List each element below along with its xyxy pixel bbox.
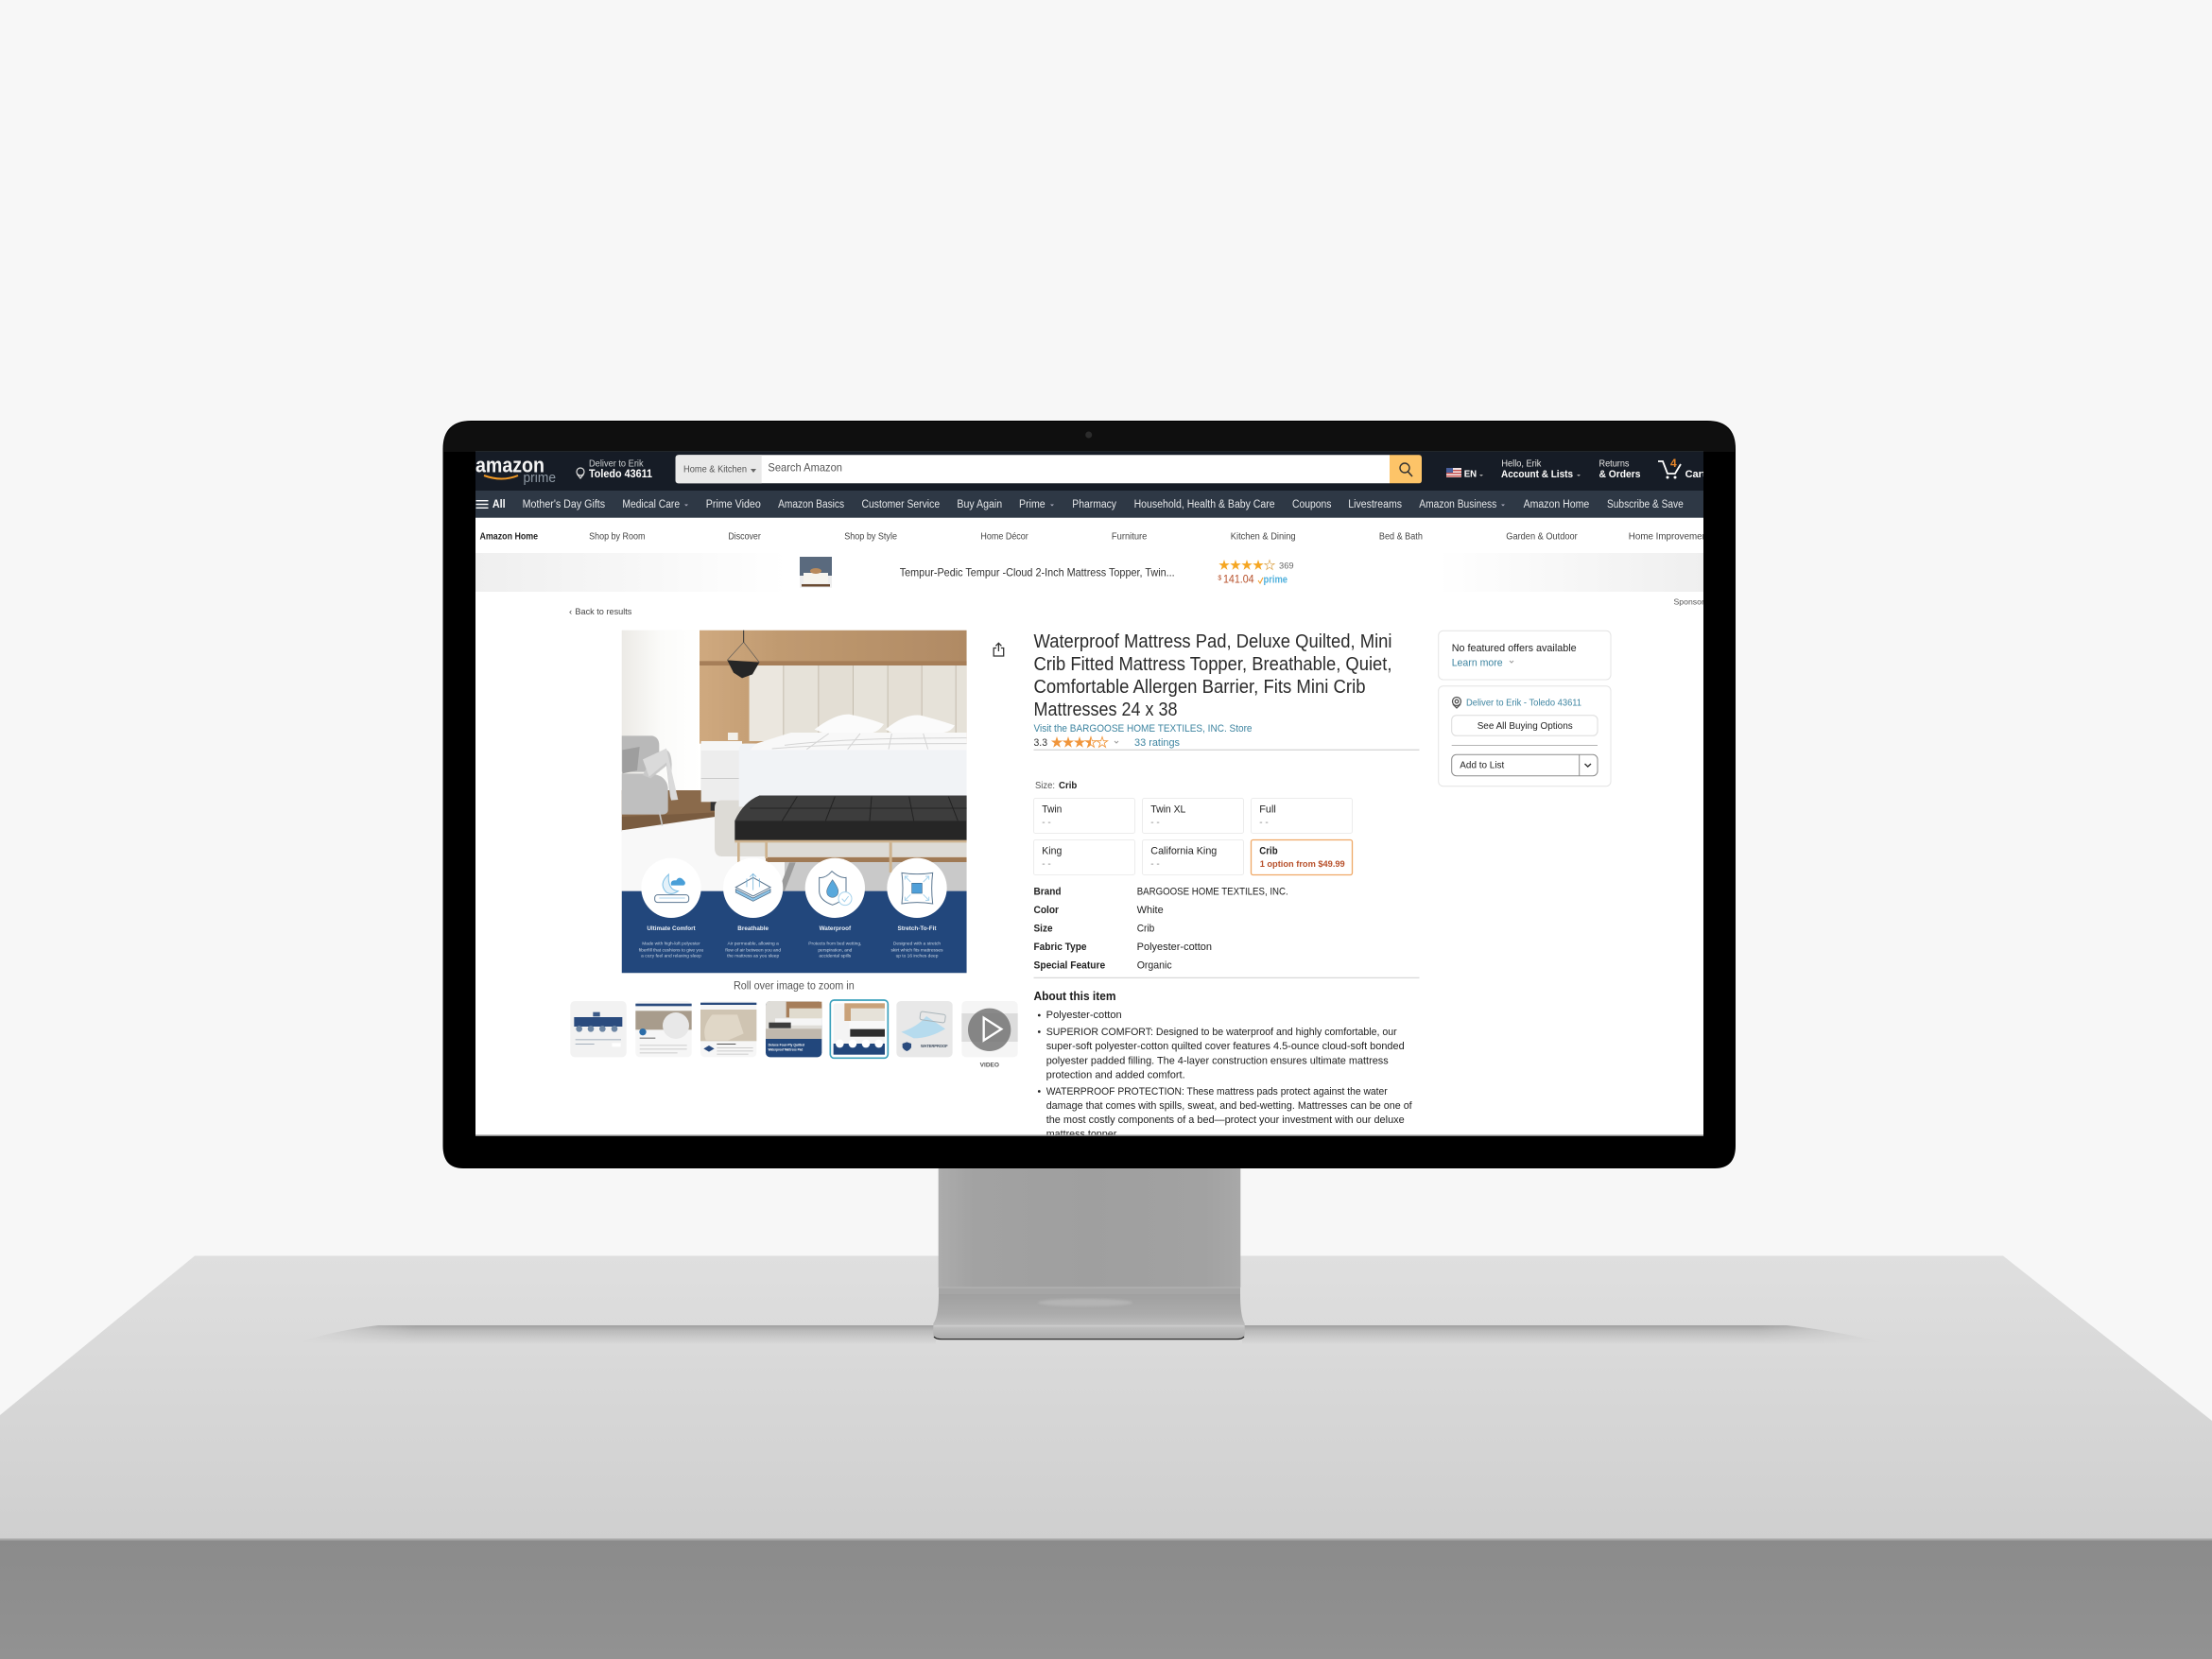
size option: King: - - bbox=[1042, 859, 1051, 870]
back to results link: Back to results bbox=[575, 607, 632, 617]
size selector: Crib bbox=[1059, 780, 1077, 791]
feature: breathable: Air permeable, allowing a bbox=[728, 942, 779, 947]
camera bbox=[1085, 431, 1092, 439]
secondary navigation bar: Customer Service bbox=[862, 499, 940, 510]
size option: California King bbox=[1142, 839, 1244, 875]
thumbnail 6 bbox=[896, 1001, 953, 1057]
secondary navigation bar: Prime bbox=[1019, 499, 1046, 510]
thumbnail 7 video bbox=[961, 1001, 1018, 1069]
sponsored tag: Sponsored bbox=[1673, 596, 1714, 606]
product attributes table: White bbox=[1137, 905, 1164, 916]
sponsored product strip: Tempur-Pedic Tempur -Cloud 2-Inch Mattress Topper, Twin... bbox=[900, 565, 1175, 579]
size selector bbox=[1034, 780, 1352, 875]
secondary navigation bar: Livestreams bbox=[1348, 499, 1402, 510]
language selector bbox=[1446, 468, 1483, 477]
returns and orders: & Orders bbox=[1599, 469, 1641, 480]
monitor bezel bbox=[442, 421, 1736, 1168]
category navigation bbox=[480, 532, 1703, 541]
about this item: polyester padded filling. The 4-layer construction ensures ultimate mattress bbox=[1046, 1055, 1389, 1066]
product title: Crib Fitted Mattress Topper, Breathable, Quiet, bbox=[1034, 654, 1391, 675]
cart: Cart bbox=[1685, 469, 1706, 480]
bench bbox=[734, 796, 967, 873]
search bar: Home & Kitchen bbox=[683, 464, 747, 475]
about this item bbox=[1034, 990, 1413, 1140]
size option: Twin XL: Twin XL bbox=[1150, 804, 1185, 815]
about this item: Polyester-cotton bbox=[1046, 1010, 1122, 1021]
back to results link: ‹ bbox=[569, 607, 575, 617]
size option: Crib selected: Crib bbox=[1259, 845, 1278, 856]
product attributes table: Polyester-cotton bbox=[1137, 942, 1212, 953]
product attributes table: Fabric Type bbox=[1034, 942, 1087, 953]
size selector: Size: bbox=[1035, 780, 1055, 791]
feature: stretch-to-fit: up to 16 inches deep bbox=[896, 954, 939, 959]
size option: Twin: - - bbox=[1042, 818, 1051, 828]
secondary navigation bar bbox=[475, 491, 1703, 518]
thumbnail gallery bbox=[570, 1000, 1018, 1069]
amazon prime logo: prime bbox=[524, 470, 556, 486]
size option: Twin XL: - - bbox=[1150, 818, 1160, 828]
about this item: About this item bbox=[1034, 990, 1115, 1003]
size option: Crib selected: 1 option from $49.99 bbox=[1260, 859, 1345, 870]
about this item: protection and added comfort. bbox=[1046, 1069, 1185, 1080]
category navigation: Kitchen & Dining bbox=[1231, 532, 1296, 543]
product attributes table: Brand bbox=[1034, 887, 1061, 898]
rating row bbox=[1034, 736, 1180, 749]
sponsored product strip bbox=[475, 553, 1703, 592]
product attributes table: Color bbox=[1034, 905, 1060, 916]
secondary navigation bar: Mother's Day Gifts bbox=[523, 499, 605, 510]
size option: California King: California King bbox=[1150, 845, 1217, 856]
secondary navigation bar: Prime Video bbox=[706, 499, 761, 510]
sponsored rating bbox=[1218, 560, 1294, 571]
feature: waterproof: accidental spills bbox=[819, 954, 852, 959]
mattress bbox=[739, 733, 967, 806]
pillows bbox=[815, 715, 955, 733]
category navigation: Garden & Outdoor bbox=[1506, 532, 1578, 543]
product attributes table: Crib bbox=[1137, 923, 1154, 934]
product title bbox=[1034, 631, 1391, 720]
icon: breathable layers bbox=[735, 873, 770, 901]
search button bbox=[1390, 455, 1422, 483]
feature: stretch-to-fit bbox=[887, 858, 947, 959]
top navigation bar bbox=[475, 451, 1706, 491]
feature: stretch-to-fit: skirt which fits mattresses bbox=[890, 947, 943, 953]
about this item: super-soft polyester-cotton quilted cover features 4.5-ounce cloud-soft bonded bbox=[1046, 1041, 1405, 1052]
feature: ultimate comfort: a cozy feel and relaxing sleep bbox=[641, 954, 701, 959]
table bbox=[0, 1255, 2212, 1659]
language selector: EN bbox=[1464, 468, 1477, 479]
feature: waterproof: Waterproof bbox=[820, 925, 852, 932]
feature: ultimate comfort bbox=[639, 873, 703, 959]
offers panel: No featured offers available bbox=[1452, 643, 1577, 654]
product attributes table: Special Feature bbox=[1034, 959, 1105, 971]
buying options panel: Deliver to Erik - Toledo 43611 bbox=[1466, 699, 1581, 709]
blue feature band bbox=[622, 891, 967, 973]
menu icon bbox=[476, 500, 488, 501]
delivery location: Toledo 43611 bbox=[589, 469, 653, 480]
thumbnail 4 bbox=[766, 1001, 821, 1057]
sponsored price: 141.04 bbox=[1223, 573, 1254, 586]
feature: breathable bbox=[723, 858, 783, 959]
search bar: Search Amazon bbox=[768, 461, 842, 475]
thumbnail 5 selected bbox=[830, 1000, 888, 1058]
armchair bbox=[622, 735, 678, 825]
nightstand bbox=[701, 733, 742, 811]
secondary navigation bar: Pharmacy bbox=[1072, 499, 1116, 510]
search bar bbox=[676, 455, 1422, 483]
size option: Twin: Twin bbox=[1042, 804, 1062, 815]
size option: King: King bbox=[1042, 845, 1062, 856]
about this item: damage that comes with spills, sweat, and bed-wetting. Mattresses can be one of bbox=[1046, 1100, 1413, 1112]
feature: ultimate comfort: fiberfill that cushions to give you bbox=[639, 947, 704, 953]
add to list button bbox=[1452, 754, 1598, 776]
offers panel bbox=[1439, 631, 1611, 680]
thumbnail 4: Waterproof Mattress Pad bbox=[769, 1048, 803, 1052]
headboard bbox=[750, 665, 967, 741]
icon: location pin bbox=[1452, 698, 1461, 708]
monitor stand bbox=[933, 1165, 1245, 1339]
monitor shadow on table bbox=[333, 1325, 1843, 1340]
rating row: 3.3 bbox=[1034, 737, 1047, 749]
screen bbox=[475, 451, 1714, 1140]
icon: share bbox=[994, 643, 1004, 656]
size option: Full: - - bbox=[1259, 818, 1269, 828]
category navigation: Discover bbox=[728, 532, 761, 543]
feature: breathable: Breathable bbox=[737, 925, 769, 932]
about this item: the most costly components of a bed—protect your investment with our deluxe bbox=[1046, 1115, 1405, 1126]
size option: California King: - - bbox=[1150, 859, 1160, 870]
sponsored price: prime bbox=[1263, 575, 1287, 586]
category navigation: Amazon Home bbox=[480, 532, 539, 543]
cart bbox=[1658, 459, 1703, 478]
category navigation: Shop by Room bbox=[589, 532, 645, 543]
main product image bbox=[622, 631, 967, 973]
secondary navigation bar: Medical Care bbox=[622, 499, 680, 510]
sponsored thumbnail bbox=[800, 557, 832, 588]
product title: Mattresses 24 x 38 bbox=[1034, 700, 1178, 720]
secondary navigation bar: Household, Health & Baby Care bbox=[1134, 499, 1275, 510]
account menu bbox=[1501, 459, 1581, 477]
bed base bbox=[715, 801, 967, 862]
rating row: 33 ratings bbox=[1134, 737, 1180, 749]
account menu: Hello, Erik bbox=[1501, 458, 1542, 469]
secondary navigation bar: Amazon Home bbox=[1524, 499, 1589, 510]
about this item: WATERPROOF PROTECTION: These mattress pads protect against the water bbox=[1046, 1086, 1388, 1097]
feature: waterproof bbox=[805, 858, 865, 959]
pendant lamp bbox=[727, 631, 759, 678]
zoom hint: Roll over image to zoom in bbox=[734, 981, 855, 993]
secondary navigation bar: Subscribe & Save bbox=[1607, 499, 1684, 510]
feature: waterproof: perspiration, and bbox=[818, 947, 853, 953]
size option: Crib selected bbox=[1252, 839, 1352, 875]
delivery location bbox=[577, 458, 653, 480]
amazon prime logo bbox=[476, 461, 556, 485]
thumbnail 4: Deluxe Four-Ply Quilted bbox=[769, 1044, 804, 1047]
category navigation: Home Improvement bbox=[1629, 532, 1710, 543]
amazon prime logo: amazon bbox=[475, 454, 544, 476]
category navigation: Bed & Bath bbox=[1379, 532, 1423, 543]
size option: Full: Full bbox=[1259, 804, 1276, 815]
size option: Twin XL bbox=[1142, 798, 1244, 834]
category navigation: Home Décor bbox=[980, 532, 1028, 543]
thumbnail 2 bbox=[635, 1001, 692, 1057]
icon: shield and drop bbox=[820, 872, 852, 906]
feature: waterproof: Protects from bed wetting, bbox=[808, 942, 861, 947]
product attributes table: Organic bbox=[1137, 959, 1172, 971]
product attributes table bbox=[1034, 887, 1288, 971]
sponsored price bbox=[1218, 575, 1287, 585]
store link: Visit the BARGOOSE HOME TEXTILES, INC. Store bbox=[1034, 723, 1252, 734]
product title: Comfortable Allergen Barrier, Fits Mini Crib bbox=[1034, 677, 1365, 698]
feature: breathable: flow of air between you and bbox=[725, 947, 781, 953]
see all buying options button: See All Buying Options bbox=[1478, 721, 1573, 732]
size option: Twin bbox=[1034, 798, 1134, 834]
cart: 4 bbox=[1670, 457, 1677, 470]
see all buying options button bbox=[1452, 716, 1598, 735]
icon: moon and cloud bbox=[655, 874, 689, 903]
buying options panel bbox=[1439, 686, 1611, 786]
secondary navigation bar: Coupons bbox=[1292, 499, 1332, 510]
category navigation: Shop by Style bbox=[844, 532, 898, 543]
product attributes table: Size bbox=[1034, 923, 1053, 934]
product attributes table: BARGOOSE HOME TEXTILES, INC. bbox=[1137, 887, 1288, 898]
account menu: Account & Lists bbox=[1501, 469, 1573, 480]
feature: stretch-to-fit: Stretch-To-Fit bbox=[897, 925, 937, 932]
secondary navigation bar: Amazon Basics bbox=[778, 499, 844, 510]
size option: Full bbox=[1252, 798, 1352, 834]
feature: stretch-to-fit: Designed with a stretch bbox=[893, 942, 941, 947]
delivery location: Deliver to Erik bbox=[589, 458, 645, 469]
thumbnail 6: WATERPROOF bbox=[921, 1044, 948, 1048]
icon: stretch square bbox=[902, 873, 933, 904]
add to list button: Add to List bbox=[1460, 760, 1504, 771]
secondary navigation bar: Amazon Business bbox=[1419, 499, 1497, 510]
category navigation: Furniture bbox=[1112, 532, 1148, 543]
size option: King bbox=[1034, 839, 1134, 875]
thumbnail 1 bbox=[570, 1001, 627, 1057]
secondary navigation bar: All bbox=[493, 499, 506, 510]
returns and orders bbox=[1599, 459, 1641, 477]
offers panel: Learn more bbox=[1452, 657, 1503, 668]
about this item: SUPERIOR COMFORT: Designed to be waterproof and highly comfortable, our bbox=[1046, 1027, 1397, 1038]
sponsored price: $ bbox=[1218, 575, 1221, 581]
feature: breathable: the mattress as you sleep bbox=[727, 954, 779, 959]
thumbnail 3 bbox=[700, 1001, 756, 1057]
secondary navigation bar: Buy Again bbox=[957, 499, 1002, 510]
thumbnail 7 video: VIDEO bbox=[980, 1063, 999, 1069]
floor and rug bbox=[622, 790, 717, 817]
returns and orders: Returns bbox=[1599, 458, 1630, 469]
product title: Waterproof Mattress Pad, Deluxe Quilted, Mini bbox=[1034, 631, 1391, 652]
sponsored rating: 369 bbox=[1279, 561, 1294, 571]
about this item: mattress topper. bbox=[1046, 1129, 1119, 1140]
feature: ultimate comfort: Ultimate Comfort bbox=[647, 925, 697, 932]
feature: ultimate comfort: Made with high-loft polyester bbox=[642, 942, 700, 947]
